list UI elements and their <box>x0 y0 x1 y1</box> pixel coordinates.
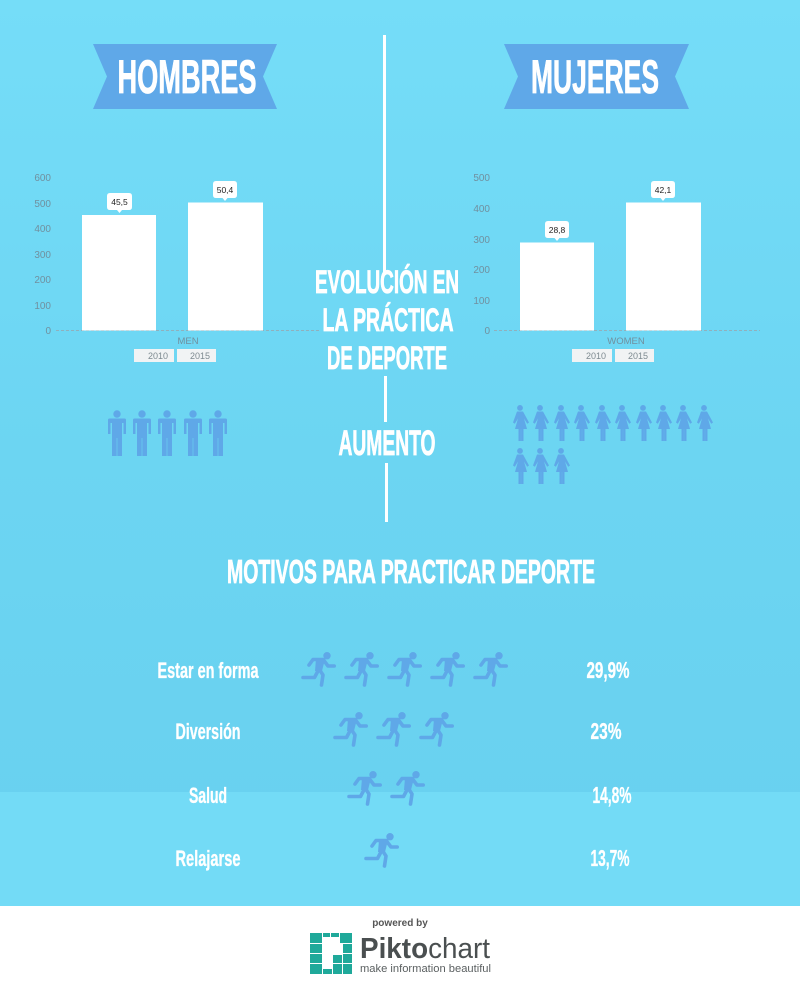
y axis: men: 0 <box>45 326 51 337</box>
y axis: women: 200 <box>473 265 490 276</box>
icons: runners <box>335 712 452 745</box>
legend: women: 2015 <box>628 351 648 361</box>
y axis: men <box>34 173 51 337</box>
bar: men 2015 <box>188 202 263 330</box>
value label: 45,5 <box>107 193 132 213</box>
value label: 50,4: 50,4 <box>217 185 234 195</box>
heading: evolución <box>315 264 459 376</box>
y axis: men: 200 <box>34 275 51 286</box>
legend: men: 2010 <box>148 351 168 361</box>
row: diversión <box>176 712 622 745</box>
vertical divider <box>383 35 388 522</box>
legend: women <box>572 349 654 362</box>
heading: evolución: EVOLUCIÓN EN <box>315 264 459 300</box>
piktochart logo mark <box>310 933 352 974</box>
y axis: men: 300 <box>34 250 51 261</box>
icons: men pictogram <box>108 410 227 456</box>
bar chart: men <box>34 173 320 362</box>
icons: runners <box>349 771 423 804</box>
icons: runners <box>303 652 506 685</box>
y axis: women: 300 <box>473 235 490 246</box>
value label: 50,4 <box>213 181 237 201</box>
heading: aumento: AUMENTO <box>338 424 436 463</box>
banner: hombres <box>93 44 277 109</box>
heading: evolución: LA PRÁCTICA <box>322 302 454 338</box>
banner: hombres: HOMBRES <box>118 50 256 103</box>
value label: 45,5: 45,5 <box>111 197 128 207</box>
banner: mujeres <box>504 44 689 109</box>
y axis: men: 500 <box>34 199 51 210</box>
icon: runner <box>366 833 397 866</box>
y axis: women: 400 <box>473 204 490 215</box>
y axis: women: 100 <box>473 296 490 307</box>
legend: women: 2010 <box>586 351 606 361</box>
value label: 28,8: 28,8 <box>549 225 566 235</box>
row: estar en forma <box>158 652 630 685</box>
tagline: make information beautiful <box>360 963 491 975</box>
legend: men: 2015 <box>190 351 210 361</box>
bar: women 2015 <box>626 202 701 330</box>
value label: 28,8 <box>545 221 569 241</box>
footer <box>0 906 800 986</box>
bar chart: women <box>473 173 760 362</box>
y axis: men: 600 <box>34 173 51 184</box>
heading: evolución: DE DEPORTE <box>327 340 447 376</box>
y axis: women: 500 <box>473 173 490 184</box>
powered by: powered by <box>372 918 428 929</box>
label: Relajarse <box>176 846 240 871</box>
category label: women: WOMEN <box>607 336 645 347</box>
y axis: women: 0 <box>484 326 490 337</box>
label: Salud <box>189 783 227 808</box>
label: Estar en forma <box>158 658 259 683</box>
y axis: men: 100 <box>34 301 51 312</box>
piktochart wordmark: Piktochart <box>360 933 490 965</box>
value label: 42,1: 42,1 <box>655 185 672 195</box>
value label: 42,1 <box>651 181 675 201</box>
icons: women pictogram <box>513 405 713 484</box>
label: Diversión <box>176 719 240 744</box>
banner: mujeres: MUJERES <box>531 50 659 103</box>
y axis: men: 400 <box>34 224 51 235</box>
row: salud <box>189 771 632 808</box>
row: relajarse <box>176 833 630 871</box>
bar: women 2010 <box>520 242 594 330</box>
value: 14,8% <box>592 782 632 808</box>
y axis: women <box>473 173 490 337</box>
value: 13,7% <box>590 845 630 871</box>
bar: men 2010 <box>82 215 156 330</box>
category label: men: MEN <box>177 336 199 347</box>
value: 29,9% <box>586 657 630 683</box>
value: 23% <box>590 718 622 744</box>
legend: men <box>134 349 216 362</box>
